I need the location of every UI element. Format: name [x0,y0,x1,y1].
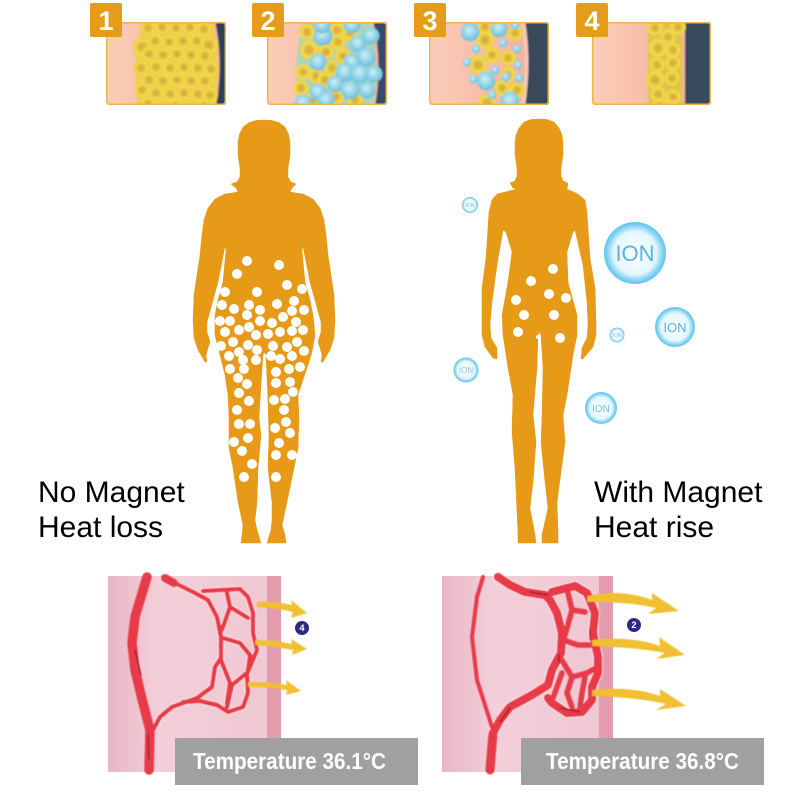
badge: number 4: 4 [584,6,600,36]
panel: step 1 fat cells [106,22,226,105]
label: temperature 36.1: Temperature 36.1°C [193,748,386,774]
badge: number 1 [90,3,122,37]
icon: ion bubble lower left [454,358,478,382]
panel: blood vessels without magnet [108,576,309,772]
label: temperature 36.8 [521,738,764,785]
badge: purple marker left: 4 [299,623,305,633]
icon: tiny ion bubble center: ION [613,333,622,339]
badge: purple marker right: 2 [631,620,637,630]
vessel network right [472,577,598,770]
badge: number 4 [576,3,608,37]
icon: tiny ion bubble upper left [462,197,478,213]
text: no magnet heat loss [38,476,185,544]
icon: tiny ion bubble upper left: ION [466,203,475,209]
badge: number 1: 1 [98,6,114,36]
panel: blood vessels with magnet [442,576,686,772]
badge: purple marker left [295,621,309,635]
icon: ion bubble lower right: ION [592,404,610,415]
badge: number 3 [414,3,446,37]
text: no magnet heat loss: No Magnet [38,476,185,509]
arrows: large heat arrows right [587,593,686,710]
badge: number 2: 2 [260,6,276,36]
icon: tiny ion bubble center [610,328,624,342]
text: no magnet heat loss: Heat loss [38,511,163,544]
panel: step 2 fat cells with ions [266,22,388,105]
icon: ion bubble lower right [585,392,617,424]
figure: slim silhouette with few fat dots [482,119,596,543]
label: temperature 36.1 [175,738,418,785]
icon: large ion bubble [604,222,666,284]
text: with magnet heat rise [594,476,763,544]
icon: medium ion bubble right [655,307,695,347]
badge: number 3: 3 [422,6,438,36]
arrows: small heat arrows left [248,600,307,695]
icon: large ion bubble: ION [615,241,655,266]
icon: ion bubble lower left: ION [459,366,473,375]
badge: number 2 [252,3,284,37]
text: with magnet heat rise: Heat rise [594,511,714,544]
panel: step 3 fat cells shrinking [428,22,550,105]
label: temperature 36.8: Temperature 36.8°C [546,748,739,774]
panel: step 4 thin fat layer [592,22,712,105]
icon: medium ion bubble right: ION [663,320,687,335]
figure: overweight silhouette with fat dots [193,120,335,543]
badge: purple marker right [627,618,641,632]
text: with magnet heat rise: With Magnet [594,476,763,509]
vessel network left [132,577,257,770]
